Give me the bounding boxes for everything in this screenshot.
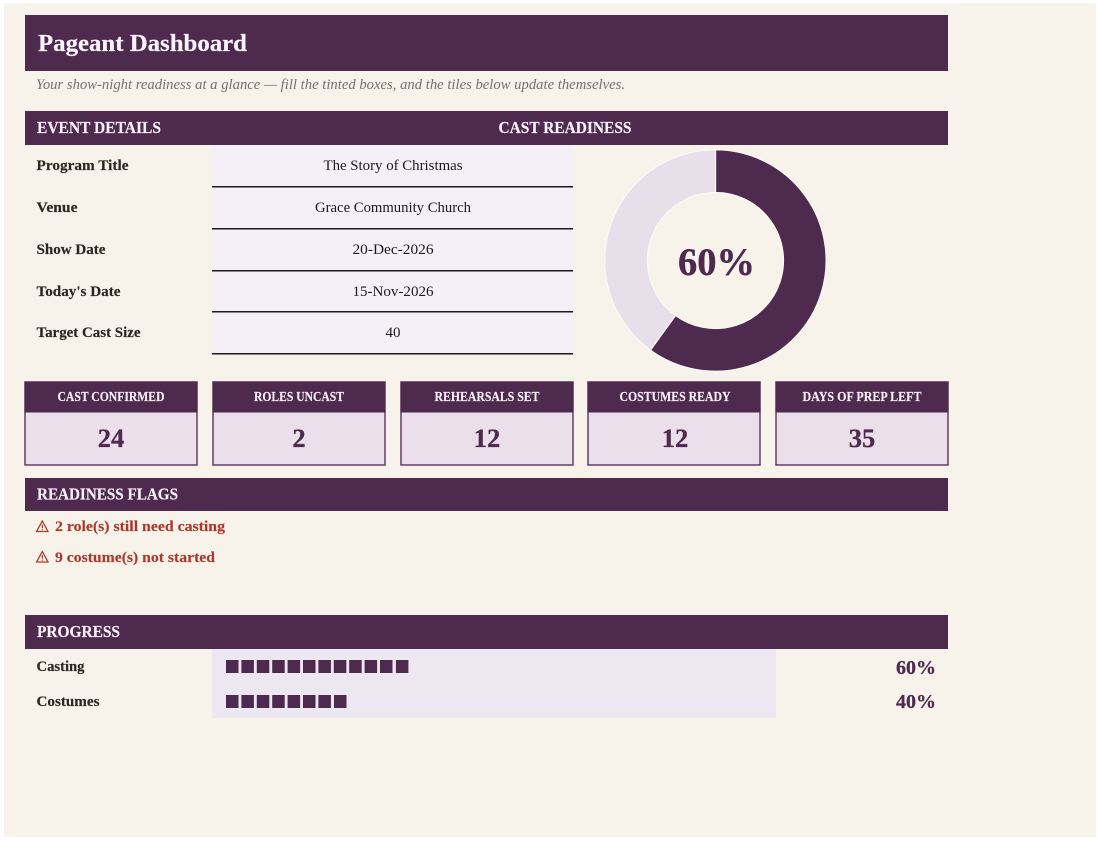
tile: rehearsals set: REHEARSALS SET	[434, 389, 540, 404]
progress row: casting: Casting	[36, 659, 85, 675]
panel: event details: 20-Dec-2026	[352, 242, 434, 258]
tile: costumes ready	[588, 382, 760, 465]
tile: roles uncast: ROLES UNCAST	[254, 389, 344, 404]
panel: progress bars	[36, 649, 936, 718]
tile: rehearsals set	[400, 382, 574, 465]
panel: event details: 15-Nov-2026	[352, 284, 434, 300]
section header: event details and cast readiness: EVENT DETAILS	[37, 118, 161, 137]
progress row: costumes: Costumes	[36, 694, 100, 710]
section header: progress	[25, 615, 948, 649]
tile: days of prep left: DAYS OF PREP LEFT	[802, 389, 922, 404]
donut chart: cast readiness 60%: 60%	[678, 241, 755, 284]
tile: days of prep left: 35	[849, 423, 875, 453]
title banner	[25, 15, 948, 71]
progress row: costumes: 40%	[896, 691, 936, 713]
panel: event details: Venue	[36, 200, 78, 216]
panel: event details: Show Date	[36, 242, 106, 258]
tile: rehearsals set: 12	[474, 423, 500, 453]
tile: cast confirmed	[24, 382, 198, 465]
panel: event details: Today's Date	[36, 284, 121, 300]
flag: roles need casting: 2 role(s) still need casting	[55, 519, 226, 535]
section header: readiness flags: READINESS FLAGS	[37, 484, 178, 504]
section header: readiness flags	[25, 478, 948, 511]
donut chart: cast readiness 60%	[605, 150, 826, 371]
tile: cast confirmed: CAST CONFIRMED	[58, 389, 165, 404]
progress row: costumes	[36, 691, 936, 713]
flag: costumes not started: 9 costume(s) not started	[55, 550, 216, 566]
panel: event details: 40	[386, 325, 400, 341]
section header: event details and cast readiness: CAST READINESS	[498, 118, 632, 137]
tile: costumes ready: 12	[662, 423, 688, 453]
section header: progress: PROGRESS	[37, 622, 120, 641]
progress row: casting	[36, 657, 936, 679]
panel: event details: Program Title	[36, 158, 129, 174]
tile: roles uncast	[212, 382, 386, 465]
subtitle: Your show-night readiness at a glance — fill the tinted boxes, and the tiles below update themselves.	[36, 77, 625, 93]
tile: roles uncast: 2	[292, 423, 306, 453]
panel: event details: The Story of Christmas	[324, 158, 463, 174]
progress row: casting: 60%	[896, 657, 936, 679]
panel: event details: Grace Community Church	[315, 200, 471, 216]
tile: cast confirmed: 24	[98, 423, 124, 453]
tile: costumes ready: COSTUMES READY	[620, 389, 731, 404]
tile: days of prep left	[776, 382, 948, 465]
panel: event details: Target Cast Size	[36, 325, 141, 341]
title banner: Pageant Dashboard	[38, 31, 248, 57]
panel: event details	[36, 145, 573, 354]
section header: event details and cast readiness	[25, 111, 948, 145]
